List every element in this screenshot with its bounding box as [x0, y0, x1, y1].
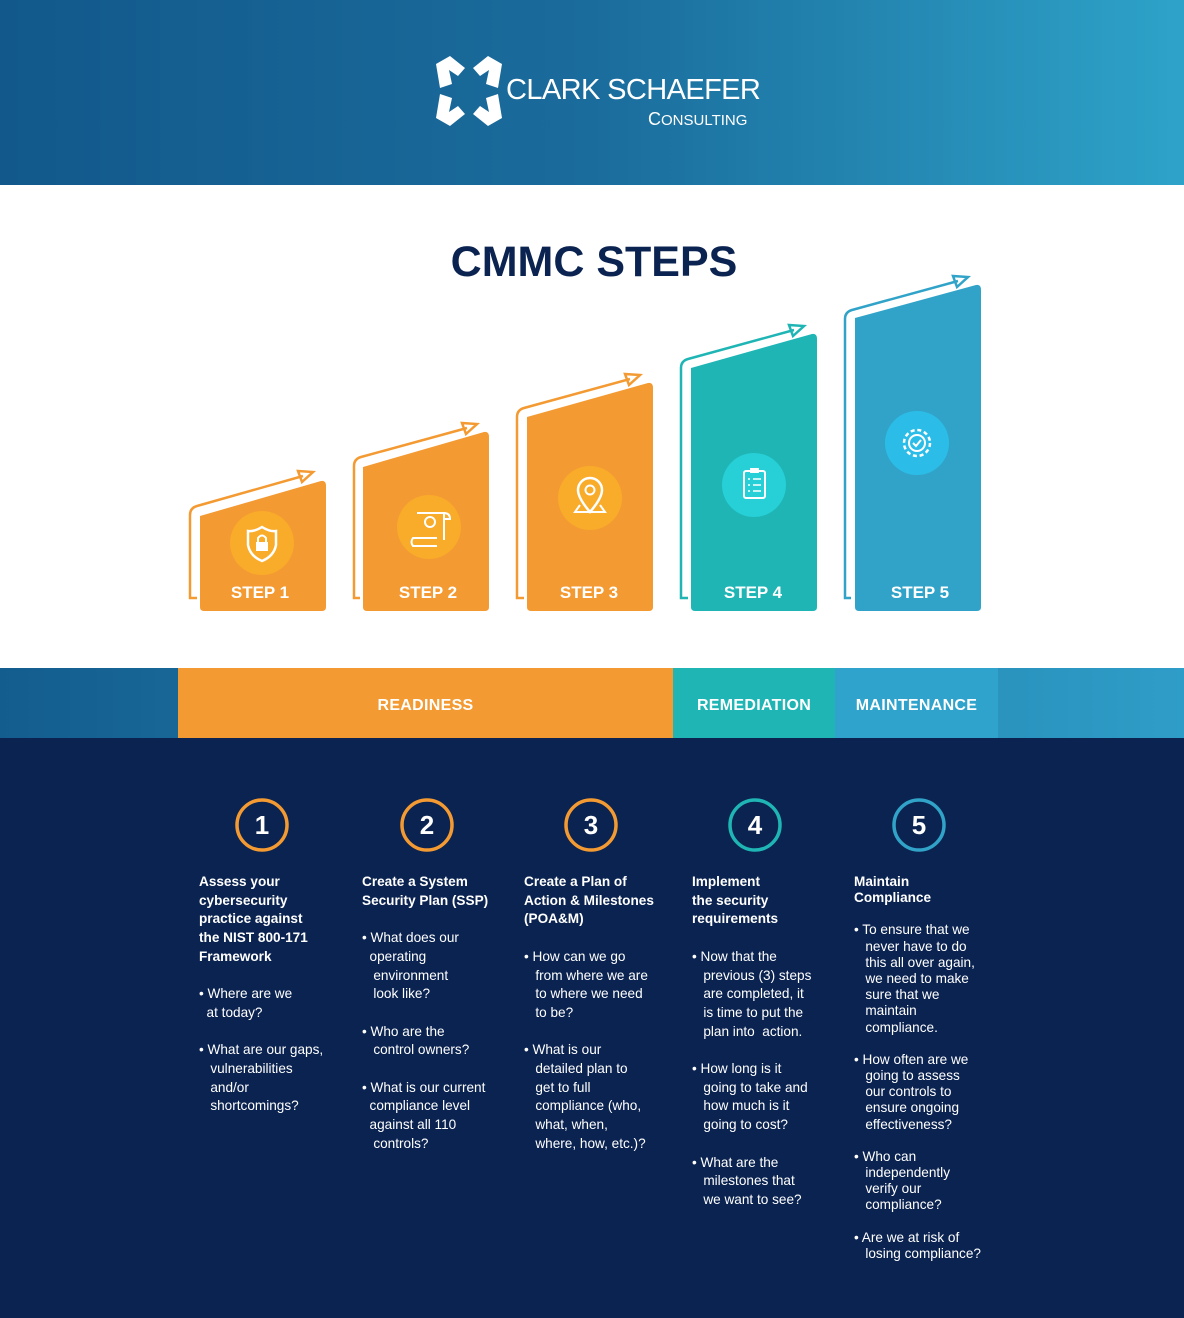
- column 1 text: practice against: [199, 911, 303, 926]
- column 5 text: never have to do: [865, 939, 967, 954]
- logo: [436, 56, 760, 129]
- column 5 text: Compliance: [854, 890, 931, 905]
- column 3 text: get to full: [535, 1080, 590, 1095]
- column 1 text: cybersecurity: [199, 893, 287, 908]
- column 3 text: detailed plan to: [535, 1061, 628, 1076]
- column 3 text: compliance (who,: [535, 1098, 641, 1113]
- column 5 text: effectiveness?: [865, 1117, 952, 1132]
- logo text: CLARK SCHAEFER: [506, 74, 760, 106]
- column 3 text: Create a Plan of: [524, 874, 627, 889]
- bottom panel: [0, 738, 1184, 1318]
- column 3 text: (POA&M): [524, 911, 584, 926]
- column 2 text: look like?: [373, 986, 430, 1001]
- column 3 text: [524, 874, 654, 1151]
- column 5 text: verify our: [865, 1181, 921, 1196]
- column 3 text: • How can we go: [524, 949, 625, 964]
- column 3 text: Action & Milestones: [524, 893, 654, 908]
- column 1 text: shortcomings?: [210, 1098, 299, 1113]
- column 1 text: Assess your: [199, 874, 280, 889]
- column 2 text: Create a System: [362, 874, 468, 889]
- column 2 text: against all 110: [370, 1117, 456, 1132]
- column 1 text: • What are our gaps,: [199, 1042, 323, 1057]
- column 4 text: we want to see?: [703, 1192, 802, 1207]
- column 4 text: the security: [692, 893, 768, 908]
- column 4 text: plan into action.: [703, 1024, 802, 1039]
- column 5 text: independently: [865, 1165, 950, 1180]
- column 4 text: going to take and: [703, 1080, 808, 1095]
- band: readiness: READINESS: [377, 697, 474, 714]
- column 2 text: operating: [370, 949, 426, 964]
- column 5 text: going to assess: [865, 1068, 960, 1083]
- column 4 text: Implement: [692, 874, 760, 889]
- column 4 text: milestones that: [703, 1173, 795, 1188]
- column 5 text: • Are we at risk of: [854, 1230, 959, 1245]
- header: [0, 0, 1184, 185]
- step 5: [845, 276, 981, 611]
- column 2 text: controls?: [373, 1136, 428, 1151]
- column 2 text: environment: [373, 968, 448, 982]
- icon: logo mark: [436, 56, 502, 126]
- column 3 text: from where we are: [535, 968, 648, 982]
- step 3: [517, 374, 653, 611]
- logo: CONSULTING: [648, 109, 747, 129]
- column 5 text: compliance?: [865, 1197, 942, 1212]
- column 2 text: Security Plan (SSP): [362, 893, 488, 908]
- column 2 text: [362, 874, 488, 1151]
- number circles: [235, 798, 946, 852]
- column 5 text: our controls to: [865, 1084, 951, 1099]
- step 1: [190, 471, 326, 611]
- column 5 text: [854, 874, 981, 1261]
- column 2 text: • What does our: [362, 930, 459, 945]
- step 3: STEP 3: [560, 583, 618, 602]
- column 1 text: at today?: [207, 1005, 262, 1020]
- column 2 text: • Who are the: [362, 1024, 445, 1039]
- column 5 text: ensure ongoing: [865, 1100, 959, 1115]
- column 2 text: • What is our current: [362, 1080, 485, 1095]
- number circles: 3: [584, 810, 598, 840]
- step 1: STEP 1: [231, 583, 289, 602]
- column 1 text: vulnerabilities: [210, 1061, 293, 1076]
- column 5 text: • Who can: [854, 1149, 916, 1164]
- column 5 text: sure that we: [865, 987, 939, 1002]
- column 5 text: • To ensure that we: [854, 922, 970, 937]
- number circles: 2: [420, 810, 434, 840]
- number circles: 1: [255, 810, 269, 840]
- column 1 text: • Where are we: [199, 986, 292, 1001]
- phase band: [0, 668, 1184, 738]
- steps chart: [188, 274, 981, 611]
- step 5: STEP 5: [891, 583, 949, 602]
- column 4 text: • How long is it: [692, 1061, 781, 1076]
- step 4: STEP 4: [724, 583, 783, 602]
- number circles: 4: [748, 810, 763, 840]
- column 1 text: the NIST 800-171: [199, 930, 308, 945]
- column 5 text: compliance.: [865, 1020, 938, 1035]
- step 2: [354, 423, 489, 611]
- column 4 text: • What are the: [692, 1154, 778, 1170]
- column 3 text: to where we need: [535, 986, 643, 1001]
- column 1 text: [199, 874, 323, 1113]
- column 4 text: going to cost?: [703, 1117, 788, 1132]
- column 5 text: this all over again,: [865, 955, 975, 970]
- band: remediation: REMEDIATION: [697, 697, 811, 714]
- step 2: STEP 2: [399, 583, 457, 602]
- column 5 text: Maintain: [854, 874, 909, 889]
- column 4 text: • Now that the: [692, 949, 777, 964]
- column 4 text: requirements: [692, 911, 778, 926]
- column 3 text: • What is our: [524, 1042, 601, 1057]
- number circles: 5: [912, 810, 926, 840]
- band: maintenance: [835, 668, 998, 738]
- column 5 text: we need to make: [865, 971, 969, 986]
- column 5 text: • How often are we: [854, 1052, 968, 1067]
- band: maintenance: MAINTENANCE: [856, 697, 977, 714]
- column 1 text: Framework: [199, 949, 272, 964]
- column 4 text: [692, 874, 811, 1207]
- title: CMMC STEPS: [451, 238, 737, 286]
- band: readiness: [178, 668, 673, 738]
- column 2 text: control owners?: [373, 1042, 469, 1057]
- column 4 text: how much is it: [703, 1098, 789, 1113]
- column 4 text: are completed, it: [703, 986, 804, 1001]
- column 5 text: losing compliance?: [865, 1246, 981, 1261]
- column 1 text: and/or: [210, 1080, 249, 1095]
- column 4 text: is time to put the: [703, 1005, 803, 1020]
- column 3 text: what, when,: [535, 1117, 608, 1132]
- column 3 text: to be?: [535, 1005, 573, 1020]
- column 2 text: compliance level: [370, 1098, 470, 1113]
- step 4: [681, 325, 817, 611]
- column 5 text: maintain: [865, 1003, 917, 1018]
- column 3 text: where, how, etc.)?: [535, 1136, 646, 1151]
- column 4 text: previous (3) steps: [703, 968, 811, 982]
- band: remediation: [673, 668, 835, 738]
